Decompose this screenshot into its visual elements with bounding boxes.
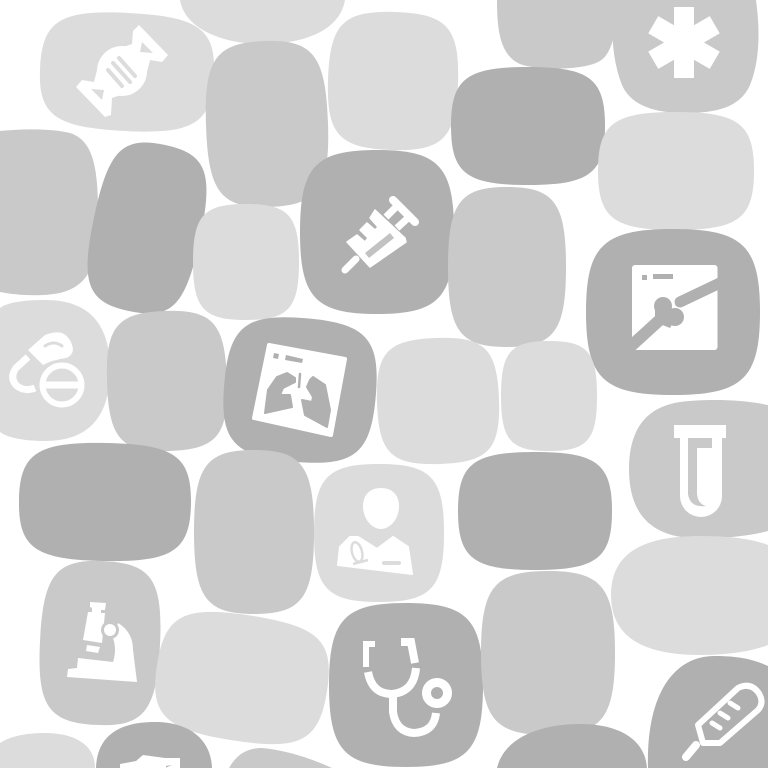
tile: mid column right — [448, 187, 566, 347]
icon: thermometer — [686, 686, 762, 757]
tile: star of life — [612, 0, 758, 113]
tile: mid column — [194, 450, 314, 614]
icon: star of life asterisk — [648, 7, 720, 78]
icon: lungs x-ray — [254, 345, 345, 435]
tile: mid lower right — [481, 571, 615, 735]
tile: mid left — [105, 309, 229, 453]
tile: slanted dark — [77, 134, 217, 322]
tile: bottom kit — [96, 722, 212, 768]
tile: lungs x-ray — [218, 312, 382, 468]
tile: thermometer — [648, 656, 768, 768]
tile: microscope — [36, 558, 164, 728]
tile: pills — [0, 300, 110, 441]
tile: bottom centre — [229, 748, 332, 768]
tile: doctor — [314, 464, 444, 602]
tile: light far right — [611, 536, 768, 655]
tile: syringe — [300, 150, 454, 314]
tile: upper centre light — [326, 10, 460, 152]
icon: doctor — [338, 488, 412, 574]
tile: dark upper right — [451, 67, 605, 185]
icon: test tube — [674, 425, 726, 517]
tile: light middle — [375, 336, 501, 466]
tile: light right — [598, 112, 754, 230]
tile: DNA — [37, 9, 217, 135]
tile: top right grey — [497, 0, 616, 69]
tile: test tube — [629, 400, 768, 538]
tile: small light — [193, 204, 299, 320]
tile: stethoscope — [329, 603, 483, 767]
tile: bottom left light — [0, 733, 95, 768]
icon: broken bone x-ray — [630, 265, 722, 350]
icon: microscope — [67, 602, 137, 682]
tile: bone x-ray — [586, 229, 760, 395]
tile: dark right — [458, 452, 612, 570]
tile: dark long left — [18, 442, 192, 562]
icon: pills — [13, 332, 81, 404]
icon: stethoscope — [366, 642, 448, 733]
tile: top centre — [180, 0, 345, 44]
tile: small light right — [501, 341, 597, 451]
icon: DNA helix — [76, 25, 168, 117]
tile: slanted light — [147, 602, 337, 754]
tile: left edge — [0, 129, 98, 295]
icon: syringe — [345, 200, 415, 270]
tile: bottom right dark — [497, 724, 647, 768]
tile: upper column — [203, 39, 331, 209]
icon: partial medical bag — [120, 755, 180, 768]
